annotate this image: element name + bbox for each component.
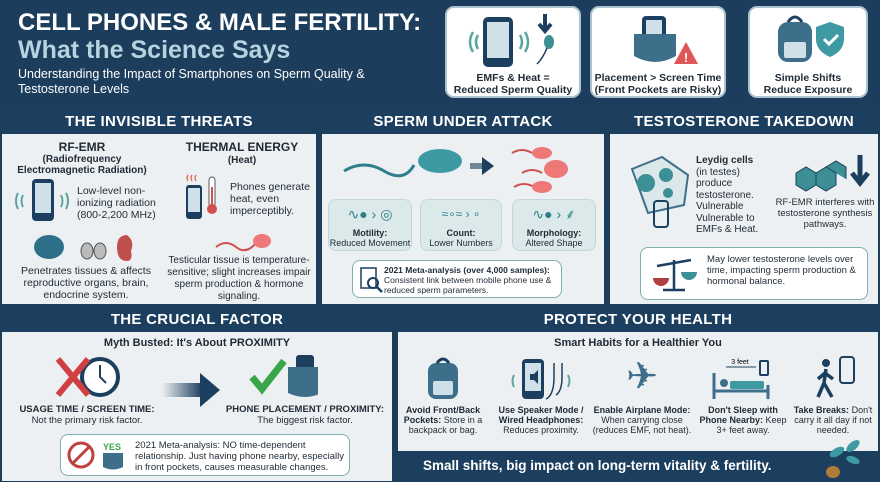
habit: airplane: Enable Airplane Mode: When carrying close (reduces EMF, not heat). [593, 405, 691, 435]
panel: crucial factor: THE CRUCIAL FACTOR [111, 311, 283, 328]
title [18, 9, 421, 96]
sub: morphology: Morphology: [527, 228, 581, 238]
callout: 2021 NO time-dependent [60, 434, 350, 476]
heading: RF-EMR: RF-EMR [59, 140, 105, 154]
habit: backpack: Avoid Front/Back Pockets: Store in a backpack or bag. [404, 405, 482, 435]
habit: airplane: ✈ [626, 356, 658, 398]
text: phone placement: PHONE PLACEMENT / PROXIMITY: [226, 404, 384, 415]
icon: phone waves [15, 179, 69, 221]
panel: protect your health [398, 307, 878, 451]
habit: sleep: Don't Sleep with Phone Nearby: Keep 3+ feet away. [699, 405, 787, 435]
habit: airplane [593, 356, 691, 435]
icons: organs [34, 235, 132, 261]
icon: phone thermometer [186, 174, 217, 219]
card: placement: ! [684, 50, 688, 65]
panel: testosterone [610, 109, 878, 304]
callout: may lower: May lower testosterone levels over time, impacting sperm production & hormonal balance. [707, 254, 856, 287]
icon: healthy to damaged sperm [343, 147, 568, 193]
habit: sleep [699, 358, 787, 435]
title: What the Science Says [18, 36, 290, 64]
icon: molecule & down arrow [796, 155, 870, 192]
title: Understanding the Impact of Smartphones on Sperm Quality & Testosterone Levels [18, 67, 365, 96]
habit: sleep: 3 feet [731, 359, 749, 366]
text: penetrates: Penetrates tissues & affects reproductive organs, brain, endocrine system. [21, 265, 151, 301]
heading: thermal: (Heat) [228, 155, 256, 166]
panel: sperm under attack [322, 109, 604, 304]
sub: morphology: Altered Shape [525, 238, 583, 248]
panel: crucial factor [2, 307, 392, 481]
sub: motility [328, 199, 412, 251]
text: RF-EMR interferes: RF-EMR interferes with testosterone synthesis pathways. [776, 197, 874, 230]
footer banner: Small shifts, big impact on long-term vitality & fertility. [423, 458, 772, 473]
sub: motility: ∿● › ◎ [348, 206, 392, 222]
callout: meta-analysis [352, 260, 562, 298]
callout: meta-analysis: 2021 Meta-analysis (over 4,000 samples): [384, 265, 550, 275]
sub: count: Lower Numbers [429, 238, 493, 248]
callout: meta-analysis: Consistent link between mobile phone use & reduced sperm parameters. [384, 275, 551, 295]
text: phone placement [226, 404, 384, 426]
habit: speaker mode: Use Speaker Mode / Wired Headphones: Reduces proximity. [498, 405, 584, 435]
card: simple shifts [748, 6, 868, 98]
callout: 2021 NO time-dependent: 2021 Meta-analysis: NO time-dependent relationship. Just having phone nearby, especially in front pockets, causes measurable changes. [135, 440, 344, 473]
subheading: Myth Busted: It's About PROXIMITY [104, 337, 290, 349]
habit: backpack [404, 358, 482, 435]
text: leydig: (in testes) produce testosterone. Vulnerable Vulnerable to EMFs & Heat. [696, 166, 758, 235]
text: low-level: Low-level non-ionizing radiation (800-2,200 MHz) [77, 185, 156, 221]
icon: X clock [56, 357, 120, 397]
sub: morphology: ∿● › ⸙ [532, 206, 576, 222]
text: usage time: USAGE TIME / SCREEN TIME: [19, 404, 155, 415]
card: EMFs & heat: Reduced Sperm Quality [454, 84, 572, 96]
panel: protect your health: PROTECT YOUR HEALTH [544, 311, 732, 328]
subheading: Smart Habits for a Healthier You [554, 337, 722, 349]
heading: RF-EMR: Electromagnetic Radiation) [17, 165, 147, 176]
callout: may lower [640, 247, 868, 300]
card: EMFs & heat: EMFs & Heat = [476, 72, 550, 84]
footer banner [398, 451, 878, 481]
sub: motility: Reduced Movement [330, 238, 410, 248]
panel: sperm under attack: SPERM UNDER ATTACK [373, 113, 553, 130]
card: placement: (Front Pockets are Risky) [595, 84, 721, 96]
arrow [164, 373, 220, 407]
text: phones generate: Phones generate heat, even imperceptibly. [230, 181, 310, 217]
callout: 2021 NO time-dependent: YES [103, 442, 121, 452]
panel: invisible threats [2, 109, 316, 304]
text: usage time: Not the primary risk factor. [32, 415, 142, 426]
card: simple shifts: Simple Shifts [775, 72, 841, 84]
habit: speaker mode [498, 359, 584, 435]
heading: thermal [186, 140, 298, 166]
text: testicular: Testicular tissue is temperature-sensitive; slight increases impair sperm production & hormone signaling. [167, 255, 311, 302]
title: CELL PHONES & MALE FERTILITY: [18, 9, 421, 36]
icon: check pocket [249, 355, 318, 397]
card: simple shifts: Reduce Exposure [764, 84, 852, 96]
heading: RF-EMR [17, 140, 147, 176]
icon: leydig cell & phone [630, 156, 690, 228]
heading: RF-EMR: (Radiofrequency [43, 154, 121, 165]
card: placement [590, 6, 726, 98]
habit: breaks [794, 356, 872, 435]
text: usage time [19, 404, 155, 426]
text: leydig: Leydig cells [696, 155, 753, 166]
panel: testosterone: TESTOSTERONE TAKEDOWN [634, 113, 854, 130]
sub: count: ≈∘≈ › ∘ [442, 207, 480, 221]
card: placement: Placement > Screen Time [595, 72, 721, 84]
sub: motility: Motility: [353, 228, 387, 238]
icon: red sperm [215, 234, 271, 252]
card: EMFs & heat [445, 6, 581, 98]
habit: breaks: Take Breaks: Don't carry it all day if not needed. [794, 405, 872, 435]
text: phone placement: The biggest risk factor. [257, 415, 353, 426]
icon: sprout [826, 440, 860, 478]
sub: count: Count: [446, 228, 476, 238]
sub: count [420, 199, 502, 251]
heading: thermal: THERMAL ENERGY [186, 140, 298, 154]
sub: morphology [512, 199, 596, 251]
panel: invisible threats: THE INVISIBLE THREATS [65, 113, 253, 130]
